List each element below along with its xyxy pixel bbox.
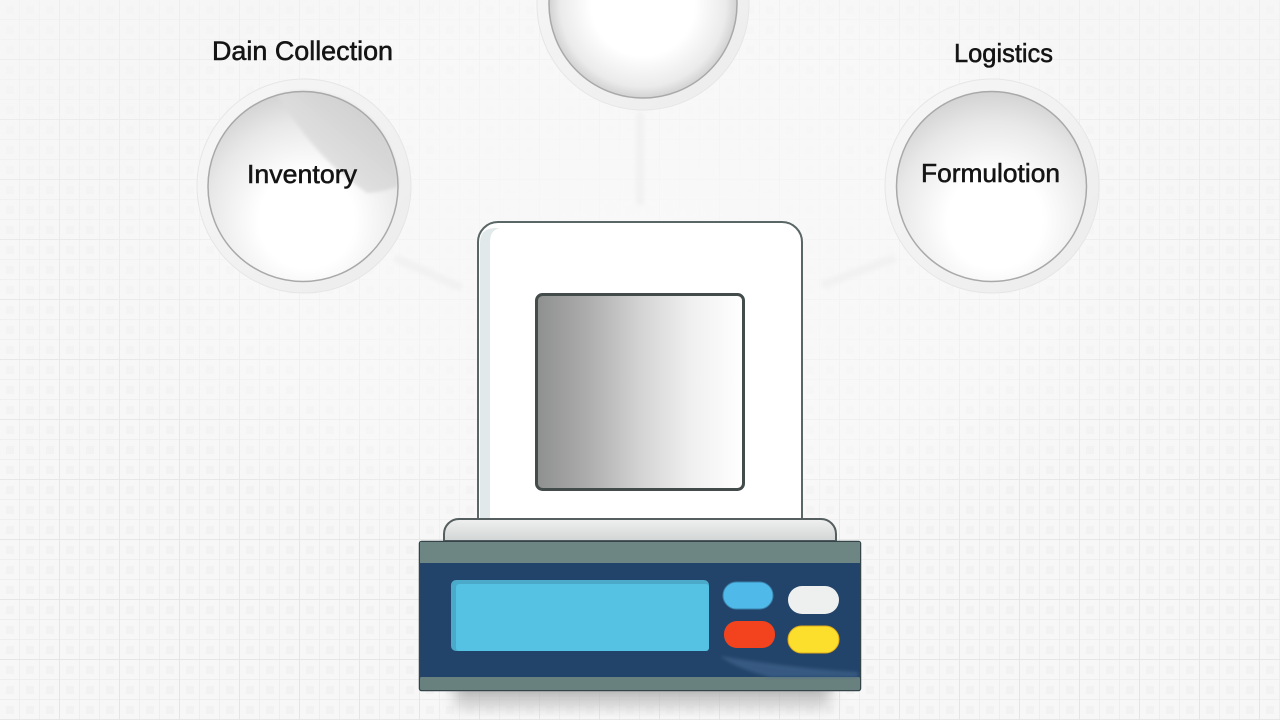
heading: Dain Collection: Dain Collection <box>212 36 393 66</box>
circle node: inventory <box>197 79 411 293</box>
button: blue <box>723 582 773 609</box>
circle node: formulation <box>885 79 1099 293</box>
scale base <box>420 542 860 690</box>
heading: Logistics: Logistics <box>954 38 1053 68</box>
scale window <box>536 294 744 490</box>
circle label: Inventory: Inventory <box>247 159 357 189</box>
scale display <box>451 580 709 651</box>
scale upper panel <box>478 222 802 519</box>
button: yellow <box>788 626 839 653</box>
circle node: top <box>537 0 749 110</box>
connector lines <box>395 112 895 288</box>
scale shadow <box>455 690 830 719</box>
device: scale <box>420 222 860 719</box>
scale tray <box>444 519 836 541</box>
circle label: Formulotion: Formulotion <box>921 158 1060 188</box>
button: red <box>724 621 775 648</box>
button: white <box>788 586 839 614</box>
